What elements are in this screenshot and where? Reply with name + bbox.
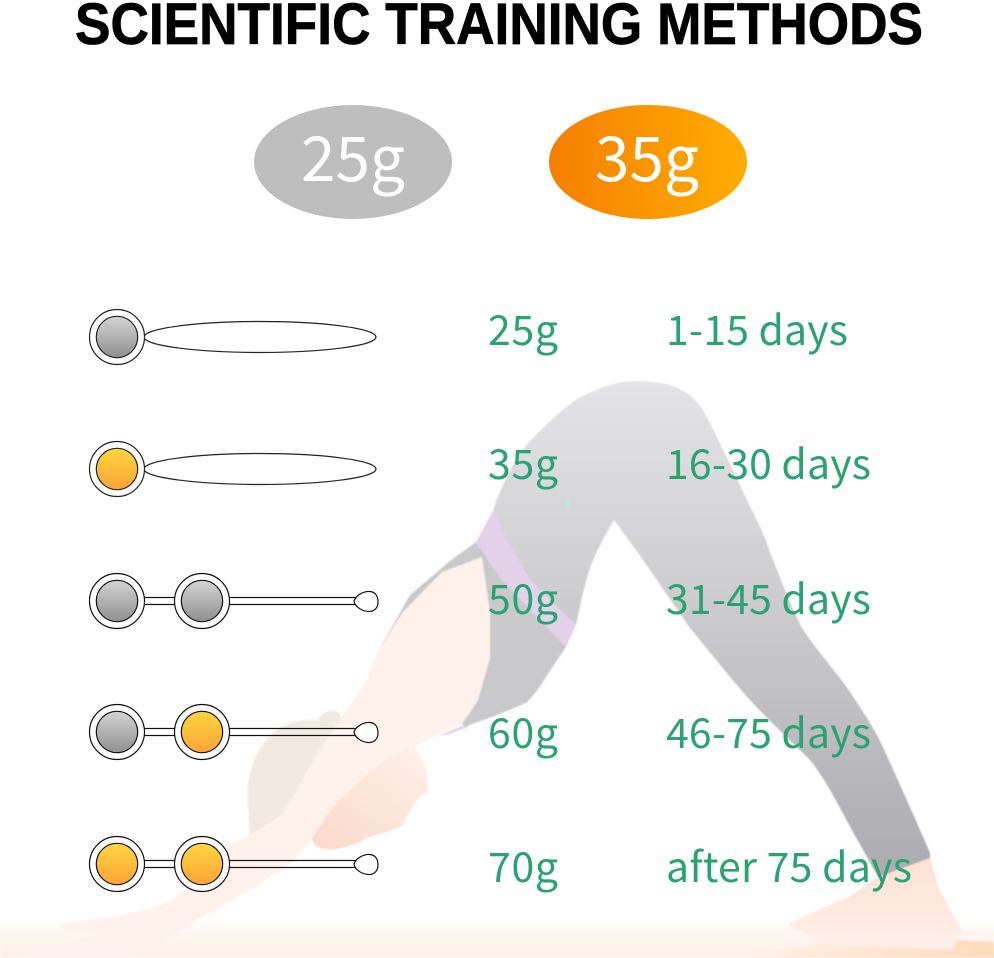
icon: two gray balls with tail [90, 574, 378, 628]
label: 1-15 days: 1-15 days [666, 297, 848, 357]
icon: gray and orange balls with tail [90, 704, 378, 760]
label: 16-30 days: 16-30 days [666, 431, 871, 491]
label: 31-45 days: 31-45 days [666, 566, 871, 626]
purple hem [438, 725, 470, 736]
leggings [494, 381, 930, 877]
purple waistband [476, 509, 576, 647]
hair [248, 711, 345, 835]
icon: single gray ball with loop [90, 310, 376, 364]
label: 25g: 25g [488, 297, 558, 357]
arm and torso skin [13, 557, 490, 958]
label: 70g: 70g [488, 834, 558, 894]
legging logo [565, 497, 571, 507]
icon: single orange ball with loop [90, 442, 376, 496]
icon: two orange balls with tail [90, 836, 378, 892]
top strap and torso garment [376, 542, 566, 726]
weight pill: 35g: 35g [595, 109, 699, 199]
background photo: faded yoga figure [0, 381, 994, 958]
label: 60g: 60g [488, 700, 558, 760]
face [300, 745, 428, 850]
label: after 75 days: after 75 days [666, 834, 912, 894]
weight pill: 35g [549, 105, 747, 219]
weight pill: 25g: 25g [301, 109, 405, 199]
weight pill: 25g [254, 105, 452, 219]
label: 35g: 35g [488, 431, 558, 491]
yoga mat floor [0, 918, 994, 958]
foot [788, 858, 962, 950]
label: 46-75 days: 46-75 days [666, 700, 871, 760]
label: 50g: 50g [488, 566, 558, 626]
